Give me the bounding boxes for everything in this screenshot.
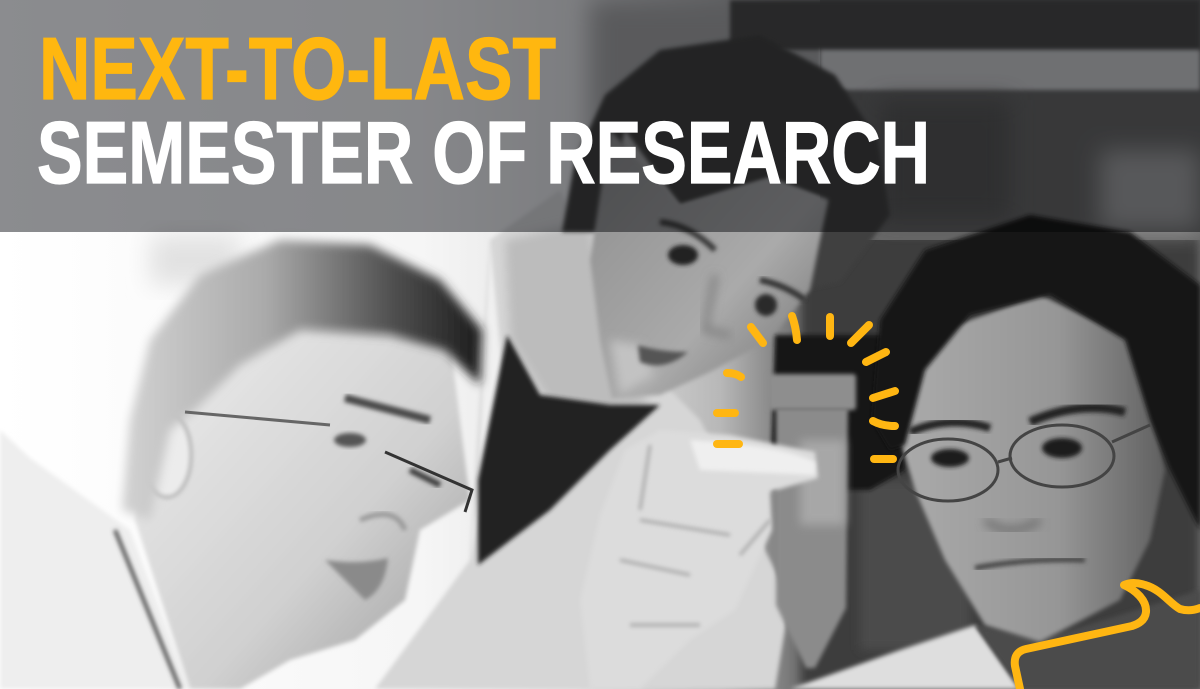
icon: speech bubble outline <box>1015 583 1200 689</box>
dark gap behind test tube <box>770 335 915 490</box>
icon: spark lines around test tube <box>717 316 895 459</box>
neck <box>975 590 1200 689</box>
person: man on left <box>0 240 482 689</box>
face and neck <box>135 320 470 689</box>
collar and shoulder <box>790 625 1020 689</box>
dark blouse <box>478 335 660 565</box>
person: woman in centre <box>375 35 890 689</box>
glasses and features <box>898 408 1150 568</box>
ear <box>143 413 191 497</box>
title band overlay <box>0 0 1200 232</box>
lab coat <box>0 430 190 689</box>
title: next-to-last: NEXT-TO-LAST <box>39 19 556 118</box>
lab coat <box>375 190 790 689</box>
glasses and features <box>185 398 472 600</box>
gloved hand <box>580 430 818 689</box>
facial features <box>638 222 805 365</box>
hair <box>122 240 482 520</box>
face <box>590 130 828 398</box>
hair <box>872 215 1200 530</box>
neck <box>505 220 650 420</box>
title: semester of research: SEMESTER OF RESEARCH <box>37 103 930 202</box>
test tube <box>768 374 856 668</box>
face <box>900 295 1165 642</box>
hair <box>562 35 890 290</box>
person: man on right <box>790 215 1200 689</box>
